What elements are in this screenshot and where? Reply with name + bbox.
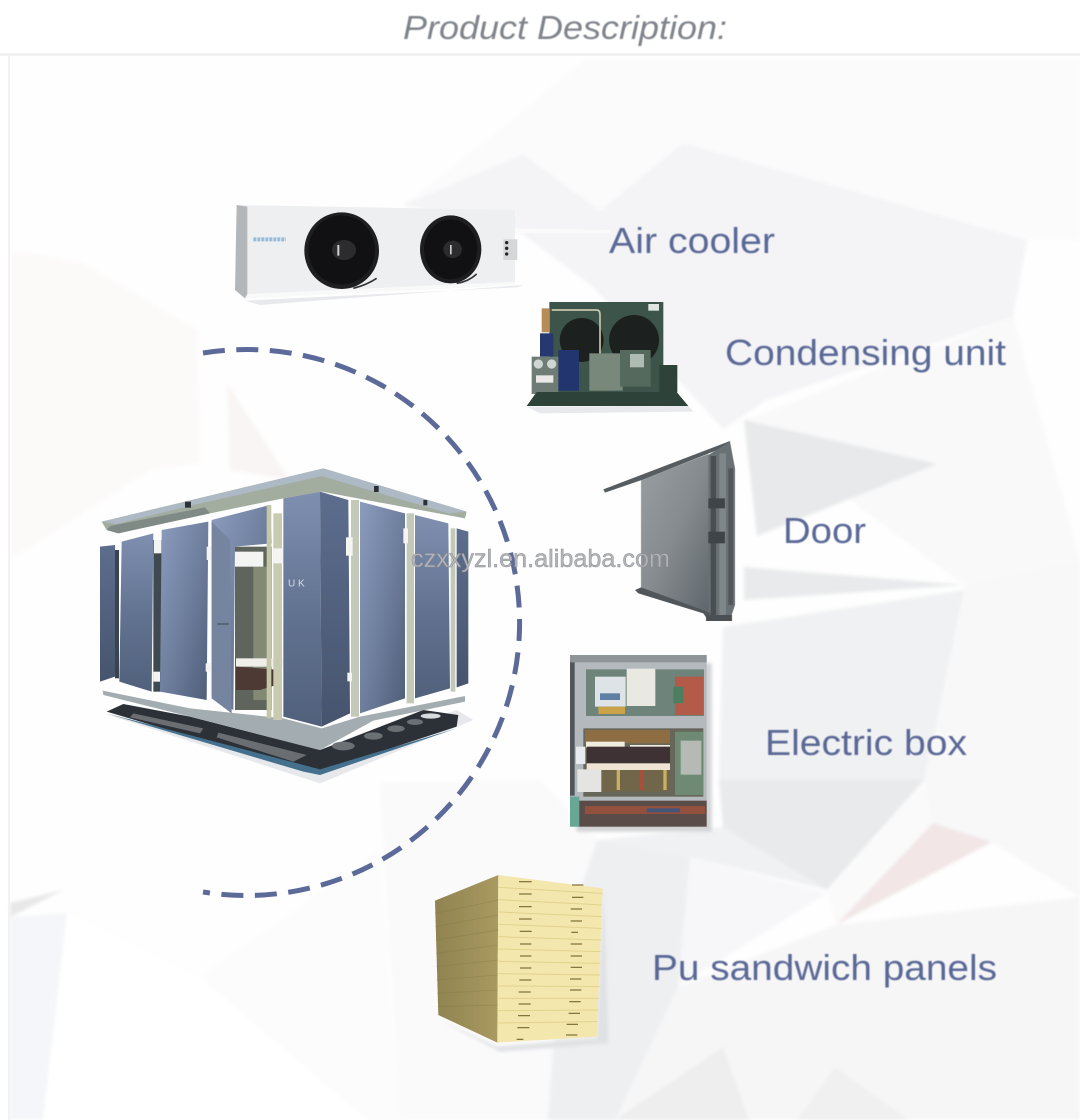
label: condensing unit: Condensing unit bbox=[725, 332, 1006, 373]
label: air cooler: Air cooler bbox=[609, 220, 775, 261]
far left panel bbox=[100, 545, 115, 682]
panel 2 bbox=[119, 533, 153, 692]
air cooler and condensing unit images bbox=[235, 205, 693, 413]
frame post right bbox=[351, 500, 359, 717]
corner panel right face bbox=[320, 492, 350, 727]
shadow: electric box bbox=[577, 663, 712, 832]
panel above door bbox=[212, 505, 272, 710]
panel front face bbox=[497, 875, 603, 1043]
right panel 4 bbox=[457, 528, 468, 687]
corner panel left face bbox=[283, 492, 322, 727]
title: Product Description: bbox=[403, 9, 727, 46]
base ledge bbox=[103, 691, 465, 750]
door and electric box images bbox=[570, 441, 735, 832]
side face ridges bbox=[435, 900, 498, 1007]
dashed arc bbox=[203, 350, 520, 896]
inner room bbox=[235, 547, 272, 710]
icon: air cooler bbox=[235, 205, 523, 305]
icon: cold room door bbox=[603, 441, 735, 621]
watermark: czxxyzl.en.alibaba.com bbox=[411, 545, 670, 573]
logo mark: U K bbox=[288, 579, 305, 590]
icon: condensing unit bbox=[527, 302, 693, 413]
dark floor frame bbox=[107, 704, 458, 775]
floor shadow bbox=[103, 710, 473, 783]
door frame posts bbox=[267, 505, 271, 718]
right panel 3 bbox=[415, 515, 450, 698]
label: electric box: Electric box bbox=[765, 722, 967, 763]
air cooler pipe highlight bbox=[515, 228, 610, 233]
label: door: Door bbox=[783, 510, 866, 551]
cold room illustration bbox=[100, 468, 473, 783]
right panel 2 bbox=[360, 502, 405, 713]
door leaf bbox=[212, 522, 232, 713]
panel side face bbox=[435, 875, 498, 1043]
roof bbox=[102, 468, 467, 533]
panel notches bbox=[517, 882, 583, 1039]
icon: pu sandwich panels stack bbox=[435, 875, 608, 1052]
panel seams bbox=[498, 887, 603, 1023]
panel 3 bbox=[160, 522, 208, 700]
stack shadow bbox=[440, 890, 608, 1052]
label: pu sandwich panels: Pu sandwich panels bbox=[652, 947, 997, 988]
icon: electric box bbox=[570, 655, 707, 827]
